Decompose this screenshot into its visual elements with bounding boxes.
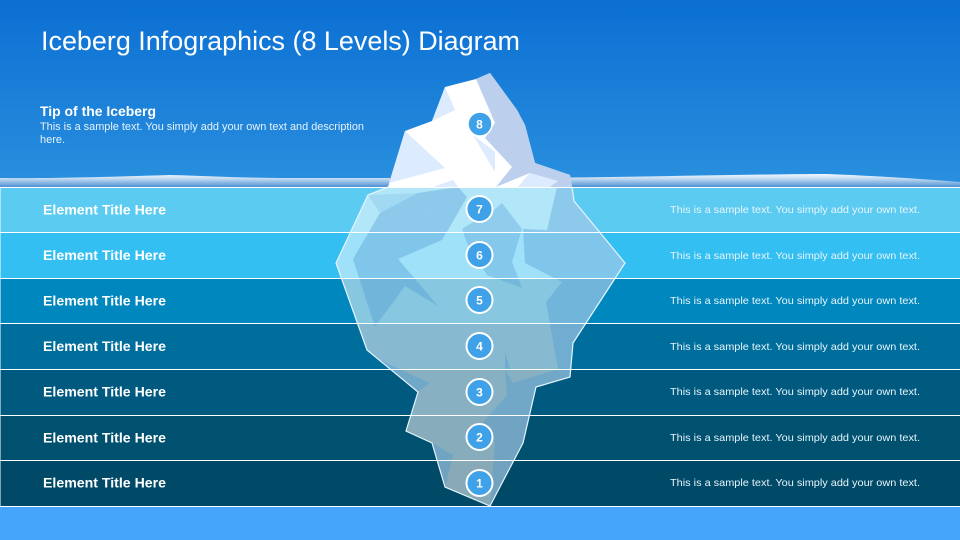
- title: Iceberg Infographics (8 Levels) Diagram: [41, 26, 520, 56]
- marker 7: [466, 196, 492, 222]
- element titles, levels 7 to 1: Element Title Here: [43, 338, 166, 354]
- tip of the iceberg text block: [40, 103, 364, 146]
- tip of the iceberg text block: This is a sample text. You simply add your own text and description: [40, 121, 364, 133]
- element titles, levels 7 to 1: Element Title Here: [43, 384, 166, 400]
- element titles, levels 7 to 1: Element Title Here: [43, 474, 166, 490]
- marker 1: [466, 470, 492, 496]
- marker 6: [466, 242, 492, 268]
- marker 4: 4: [476, 340, 483, 354]
- marker 5: [466, 287, 492, 313]
- element descriptions, levels 7 to 1: This is a sample text. You simply add your own text.: [670, 341, 920, 353]
- marker 2: [466, 424, 492, 450]
- element titles, levels 7 to 1: Element Title Here: [43, 202, 166, 218]
- element descriptions, levels 7 to 1: This is a sample text. You simply add your own text.: [670, 386, 920, 398]
- element descriptions, levels 7 to 1: This is a sample text. You simply add your own text.: [670, 295, 920, 307]
- marker 8: 8: [476, 118, 483, 132]
- depth bands: [0, 187, 960, 506]
- iceberg body below water: [336, 187, 625, 506]
- numbered level markers: [466, 112, 492, 496]
- iceberg tip above water: [388, 73, 572, 187]
- element titles, levels 7 to 1: Element Title Here: [43, 292, 166, 308]
- element titles, levels 7 to 1: Element Title Here: [43, 247, 166, 263]
- tip of the iceberg text block: here.: [40, 134, 65, 146]
- marker 6: 6: [476, 248, 483, 262]
- background: sky: [0, 0, 960, 188]
- element descriptions, levels 7 to 1: This is a sample text. You simply add your own text.: [670, 432, 920, 444]
- band divider lines over iceberg: [0, 187, 960, 507]
- marker 3: 3: [476, 386, 483, 400]
- tip of the iceberg text block: Tip of the Iceberg: [40, 103, 156, 119]
- element descriptions, levels 7 to 1: This is a sample text. You simply add your own text.: [670, 477, 920, 489]
- background: bottom sea strip: [0, 506, 960, 540]
- marker 3: [466, 379, 492, 405]
- marker 7: 7: [476, 202, 483, 216]
- marker 4: [466, 333, 492, 359]
- marker 1: 1: [476, 476, 483, 490]
- element descriptions, levels 7 to 1: This is a sample text. You simply add your own text.: [670, 204, 920, 216]
- horizon ice line: [0, 174, 960, 187]
- marker 5: 5: [476, 294, 483, 308]
- element descriptions, levels 7 to 1: [670, 204, 920, 489]
- element titles, levels 7 to 1: [43, 202, 166, 490]
- element descriptions, levels 7 to 1: This is a sample text. You simply add your own text.: [670, 250, 920, 262]
- marker 8: [468, 112, 492, 136]
- element titles, levels 7 to 1: Element Title Here: [43, 430, 166, 446]
- marker 2: 2: [476, 430, 483, 444]
- iceberg illustration: [336, 73, 625, 506]
